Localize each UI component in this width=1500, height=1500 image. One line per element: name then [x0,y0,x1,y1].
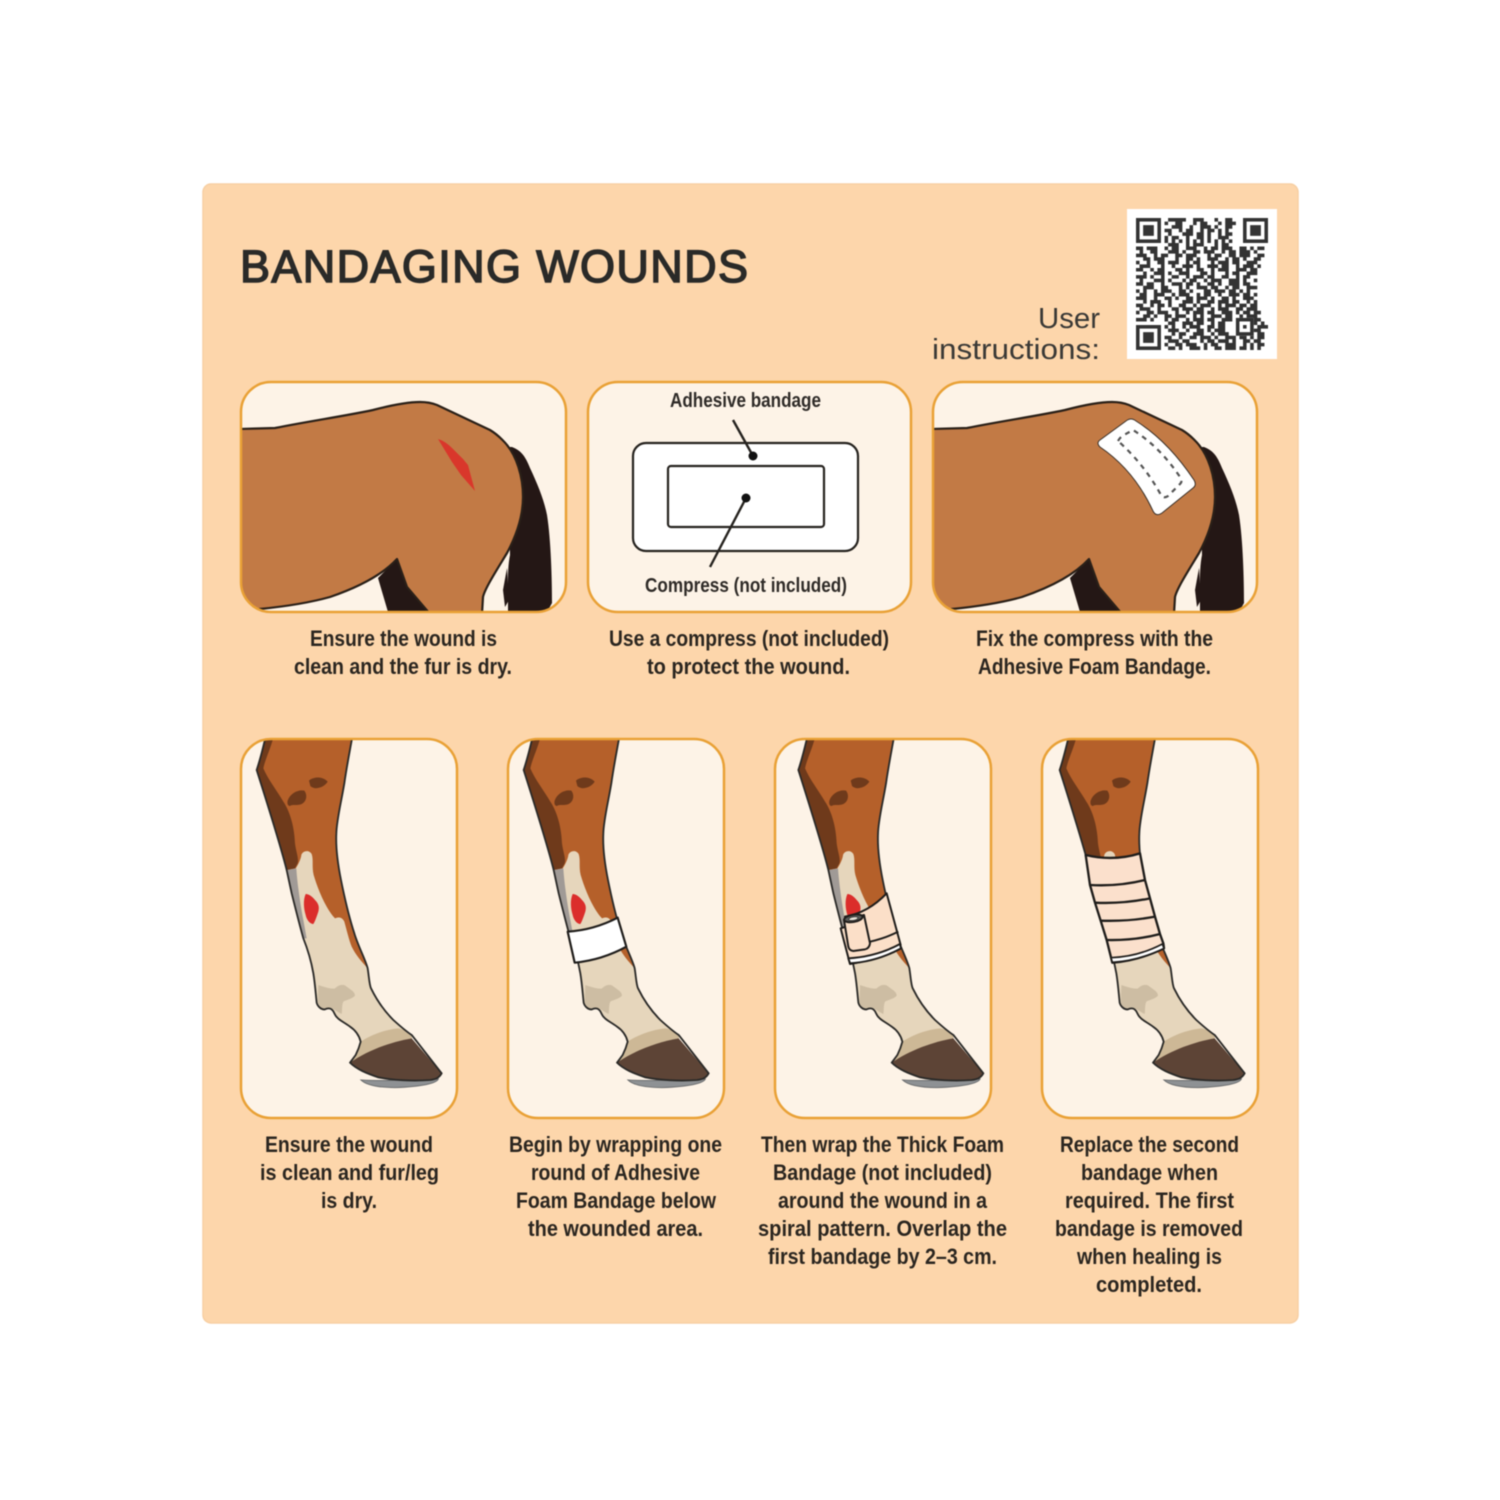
caption: leg step 1 [260,1132,439,1213]
caption: leg step 4: bandage is removed [1055,1216,1243,1241]
caption: leg step 2: the wounded area. [528,1216,703,1241]
caption: step 2: to protect the wound. [647,654,850,679]
text: user instructions label [932,303,1100,366]
caption: step 1: Ensure the wound is [310,626,497,651]
icon: white bandage band [568,918,626,963]
caption: step 3: Fix the compress with the [976,626,1213,651]
caption: step 2: Use a compress (not included) [609,626,889,651]
title: BANDAGING WOUNDS [240,241,748,292]
label: adhesive bandage: Adhesive bandage [670,390,821,412]
caption: leg step 4: required. The first [1065,1188,1235,1213]
diagram: compress inner [668,466,824,527]
caption: leg step 4 [1055,1132,1243,1297]
panel: leg step 3 [775,737,991,1118]
arrow: compress pointer [710,494,750,567]
caption: step 2 [609,626,889,679]
caption: leg step 3: Bandage (not included) [773,1160,992,1185]
icon: finished bandage wrap [1086,853,1164,963]
text: user instructions label: instructions: [932,334,1100,366]
panel: step 2 bandage diagram [588,382,911,612]
caption: leg step 4: completed. [1096,1272,1202,1297]
caption: leg step 4: bandage when [1081,1160,1218,1185]
caption: leg step 4: Replace the second [1060,1132,1239,1157]
caption: step 3: Adhesive Foam Bandage. [978,654,1211,679]
caption: leg step 3: Then wrap the Thick Foam [761,1132,1004,1157]
caption: leg step 2: Begin by wrapping one [509,1132,722,1157]
panel: leg step 1 [241,737,457,1118]
panel: leg step 2 [508,737,724,1118]
icon: thick foam bandage roll [841,893,901,964]
label: compress: Compress (not included) [645,575,847,597]
caption: step 1: clean and the fur is dry. [294,654,512,679]
caption: leg step 4: when healing is [1076,1244,1222,1269]
panel: instruction card [203,184,1298,1323]
caption: step 1 [294,626,512,679]
caption: leg step 2: round of Adhesive [531,1160,700,1185]
caption: leg step 3: spiral pattern. Overlap the [758,1216,1007,1241]
icon: adhesive patch [1098,419,1195,515]
icon: wound [438,439,475,491]
panel: leg step 4 [1042,737,1258,1118]
QR code [1127,209,1277,359]
caption: leg step 2: Foam Bandage below [516,1188,717,1213]
caption: leg step 1: Ensure the wound [265,1132,433,1157]
caption: leg step 1: is dry. [321,1188,377,1213]
arrow: adhesive bandage pointer [733,420,758,460]
diagram: adhesive bandage outer [633,443,858,551]
panel: step 3 patch on horse [930,382,1257,614]
text: user instructions label: User [1038,303,1100,335]
caption: step 3 [976,626,1213,679]
panel: step 1 wound on horse [238,382,566,614]
caption: leg step 3: around the wound in a [778,1188,988,1213]
caption: leg step 3 [758,1132,1007,1269]
caption: leg step 1: is clean and fur/leg [260,1160,439,1185]
caption: leg step 3: first bandage by 2–3 cm. [768,1244,997,1269]
caption: leg step 2 [509,1132,722,1241]
